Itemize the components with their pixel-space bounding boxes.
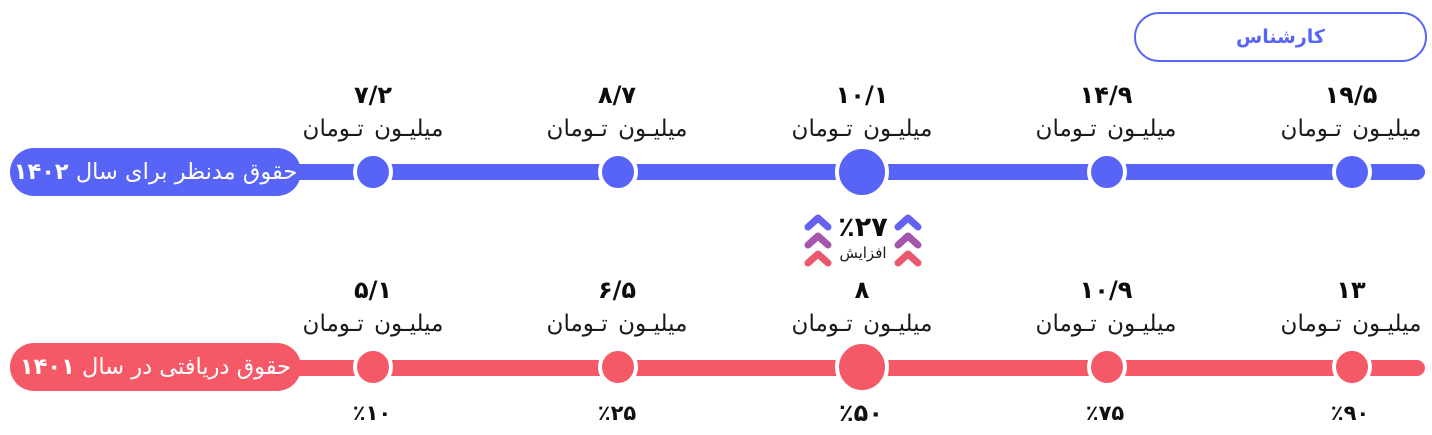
unit: میلیـون تـومان: [547, 116, 687, 142]
unit: میلیـون تـومان: [1036, 116, 1176, 142]
marker: 25th percentile: [598, 347, 638, 387]
value: 19.5: ۱۹/۵: [1325, 81, 1377, 109]
line: expected salary track: [290, 164, 1425, 180]
panel: expected salary 1402: [10, 81, 1425, 196]
marker: 10th percentile: [353, 152, 393, 192]
marker: 75th percentile: [1087, 347, 1127, 387]
percentile: 90: ٪۹۰: [1331, 401, 1369, 425]
marker: 25th percentile: [598, 152, 638, 192]
row label: expected salary 1402: حقوق مدنظر برای سال ۱۴۰۲: [14, 159, 297, 185]
value: 27 percent: ٪۲۷: [838, 212, 888, 243]
label: increase: افزایش: [839, 244, 887, 262]
unit: میلیـون تـومان: [1281, 116, 1421, 142]
callout: 27 percent increase: [804, 212, 922, 266]
unit: میلیـون تـومان: [1036, 311, 1176, 337]
marker: 50th percentile: [835, 340, 889, 394]
panel: received salary 1401: [10, 276, 1425, 427]
value: 7.2: ۷/۲: [354, 81, 392, 109]
row label: expected salary 1402: [10, 148, 301, 196]
value: 10.1: ۱۰/۱: [836, 81, 888, 109]
unit: میلیـون تـومان: [303, 116, 443, 142]
row label: received salary 1401: [10, 343, 301, 391]
row label: received salary 1401: حقوق دریافتی در سال ۱۴۰۱: [20, 354, 291, 380]
marker: 75th percentile: [1087, 152, 1127, 192]
value: 6.5: ۶/۵: [598, 276, 636, 304]
line: received salary track: [290, 360, 1425, 376]
value: 10.9: ۱۰/۹: [1080, 276, 1132, 304]
percentile: 75: ٪۷۵: [1086, 401, 1124, 425]
marker: 50th percentile: [835, 145, 889, 199]
value: 8.7: ۸/۷: [598, 81, 636, 109]
value: 13: ۱۳: [1336, 276, 1366, 304]
unit: میلیـون تـومان: [547, 311, 687, 337]
category badge: expert: کارشناس: [1236, 26, 1325, 48]
icon: right triple chevrons: [894, 214, 922, 266]
marker: 90th percentile: [1332, 347, 1372, 387]
value: 14.9: ۱۴/۹: [1080, 81, 1132, 109]
marker: 10th percentile: [353, 347, 393, 387]
category badge: expert: [1134, 12, 1427, 62]
percentile: 25: ٪۲۵: [598, 401, 636, 425]
marker: 90th percentile: [1332, 152, 1372, 192]
value: 5.1: ۵/۱: [354, 276, 392, 304]
icon: left triple chevrons: [804, 214, 832, 266]
percentile: 10: ٪۱۰: [353, 401, 391, 425]
unit: میلیـون تـومان: [303, 311, 443, 337]
percentile: 50: ٪۵۰: [839, 399, 883, 427]
unit: میلیـون تـومان: [1281, 311, 1421, 337]
unit: میلیـون تـومان: [792, 311, 932, 337]
unit: میلیـون تـومان: [792, 116, 932, 142]
value: 8: ۸: [855, 276, 869, 304]
